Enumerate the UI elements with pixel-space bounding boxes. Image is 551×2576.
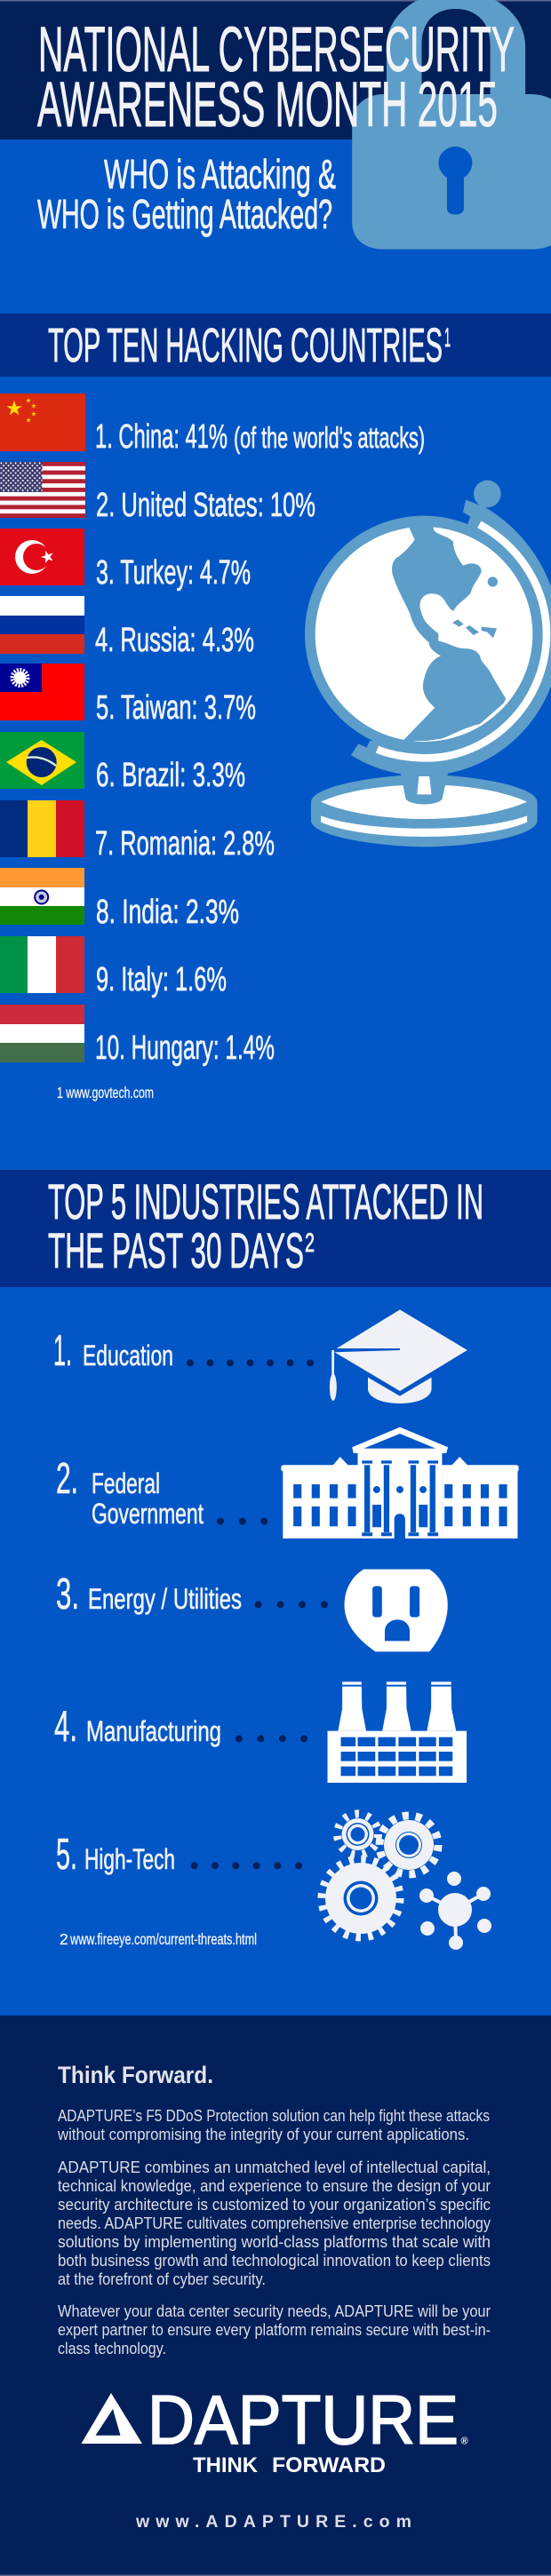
industry 5: high-tech (56, 1831, 175, 1879)
country ranking list: 8. India: 2.3% (96, 894, 239, 931)
industry 2: federal government: 2. (56, 1455, 78, 1503)
country ranking list (95, 418, 425, 1067)
industry 1: education: Education (83, 1340, 173, 1371)
section band: top ten hacking countries: 1 (444, 323, 451, 353)
footer paragraph 3: Whatever your data center security needs, ADAPTURE will be your (58, 2302, 491, 2320)
industry 5: high-tech: High-Tech (84, 1843, 175, 1875)
industry 2: federal government: Government (92, 1498, 204, 1530)
globe ocean (315, 527, 532, 742)
logo: ADAPTURE: DAPTURE (148, 2381, 459, 2459)
icon: globe base (311, 773, 538, 847)
logo: ADAPTURE: FORWARD (272, 2453, 386, 2477)
medium gear (379, 1816, 438, 1874)
industry 3: energy: 3. (56, 1570, 79, 1618)
logo: ADAPTURE (82, 2381, 468, 2477)
industry 1: education (53, 1327, 173, 1375)
footer paragraph 3: expert partner to ensure every platform remains secure with best-in- (58, 2320, 491, 2339)
section band: top 5 industries: 2 (305, 1228, 315, 1258)
icon: factory (328, 1682, 467, 1783)
footer paragraph 2: technical knowledge, and experience to ensure the design of your (58, 2176, 491, 2195)
footer paragraph 3: class technology. (58, 2339, 166, 2357)
base body (311, 775, 538, 847)
icon: graduation cap (330, 1309, 467, 1403)
industry 3: energy (56, 1570, 242, 1618)
industry 5: high-tech: 5. (56, 1831, 77, 1879)
country ranking list: 2. United States: 10% (96, 487, 315, 524)
footnote 2: 2 (60, 1930, 68, 1948)
globe disc (305, 516, 542, 752)
icon: padlock (352, 0, 551, 250)
logo: ADAPTURE: ® (460, 2436, 468, 2446)
footnote 1: 1 www.govtech.com (57, 1084, 154, 1101)
country ranking list: 7. Romania: 2.8% (95, 825, 275, 863)
footer heading: Think Forward. (58, 2062, 213, 2088)
flag: Hungary (0, 1005, 84, 1062)
subtitle (37, 151, 336, 237)
industry 4: manufacturing: 4. (54, 1703, 77, 1751)
dots: high-tech (191, 1862, 302, 1869)
footer paragraph 2: security architecture is customized to your organization’s specific (58, 2195, 491, 2214)
footer paragraph 1: without compromising the integrity of your current applications. (57, 2125, 469, 2143)
flag: Taiwan (0, 664, 84, 720)
industry 3: energy: Energy / Utilities (88, 1583, 242, 1615)
subtitle: WHO is Getting Attacked? (37, 191, 332, 237)
stem highlight (417, 776, 432, 794)
white meridian stripe (377, 524, 547, 758)
icon: government building (281, 1427, 519, 1539)
footnote 2: www.fireeye.com/current-threats.html (69, 1930, 257, 1948)
footer paragraph 3 (58, 2302, 491, 2357)
country ranking list: 4. Russia: 4.3% (95, 622, 254, 659)
industry 2: federal government (56, 1455, 204, 1530)
base top (321, 784, 527, 819)
country ranking list: 6. Brazil: 3.3% (96, 757, 245, 794)
globe knob (474, 481, 501, 507)
dots: education (187, 1359, 314, 1366)
flag: Brazil (0, 732, 84, 789)
country ranking list: 1. China: 41% (95, 418, 228, 456)
large gear (322, 1859, 400, 1937)
flag: Turkey (0, 529, 84, 585)
icon: globe (305, 481, 551, 775)
flag: Russia (0, 596, 84, 654)
flag: Romania (0, 800, 84, 857)
flag: India (0, 868, 84, 925)
footer paragraph 2: needs. ADAPTURE cultivates comprehensive enterprise technology (58, 2214, 491, 2232)
dots: manufacturing (236, 1735, 307, 1742)
industry 4: manufacturing: Manufacturing (86, 1715, 221, 1747)
small gear (338, 1814, 379, 1855)
footer paragraph 1 (57, 2106, 490, 2143)
footer panel (0, 2015, 551, 2576)
country ranking list: 5. Taiwan: 3.7% (96, 689, 256, 727)
website: www.ADAPTURE.com (135, 2512, 411, 2532)
footer paragraph 2: ADAPTURE combines an unmatched level of intellectual capital, (58, 2158, 491, 2176)
molecule (419, 1872, 491, 1950)
footer paragraph 2: both business growth and technological innovation to keep clients (58, 2251, 491, 2270)
islands (452, 576, 498, 638)
continents (392, 526, 506, 742)
footer paragraph 2: at the forefront of cyber security. (58, 2270, 266, 2288)
icon: power outlet (344, 1570, 448, 1651)
dots: energy (255, 1601, 328, 1608)
footnote 2 (60, 1930, 257, 1948)
globe outer arm (351, 500, 551, 775)
title (37, 15, 515, 140)
header band (0, 0, 551, 139)
icon: gears and molecule (322, 1814, 491, 1950)
section band: top 5 industries (0, 1170, 551, 1287)
country ranking list: (of the world's attacks) (234, 421, 425, 454)
industry 1: education: 1. (53, 1327, 72, 1375)
dots: federal government (217, 1518, 268, 1525)
stem (401, 773, 448, 804)
flag: Italy (0, 936, 84, 993)
subtitle: WHO is Attacking & (104, 151, 336, 197)
industry 2: federal government: Federal (92, 1467, 160, 1499)
industry 4: manufacturing (54, 1703, 221, 1751)
country ranking list: 10. Hungary: 1.4% (95, 1030, 275, 1067)
footer paragraph 2: solutions by implementing world-class platforms that scale with (58, 2232, 491, 2251)
section band: top 5 industries: THE PAST 30 DAYS (48, 1222, 304, 1278)
footer paragraph 2 (58, 2158, 491, 2288)
country ranking list: 3. Turkey: 4.7% (96, 554, 251, 592)
country ranking list: 9. Italy: 1.6% (96, 961, 227, 998)
logo: ADAPTURE: THINK (193, 2453, 259, 2477)
flag: China (0, 394, 85, 451)
base rim (321, 815, 527, 837)
flag: United States (0, 462, 85, 518)
